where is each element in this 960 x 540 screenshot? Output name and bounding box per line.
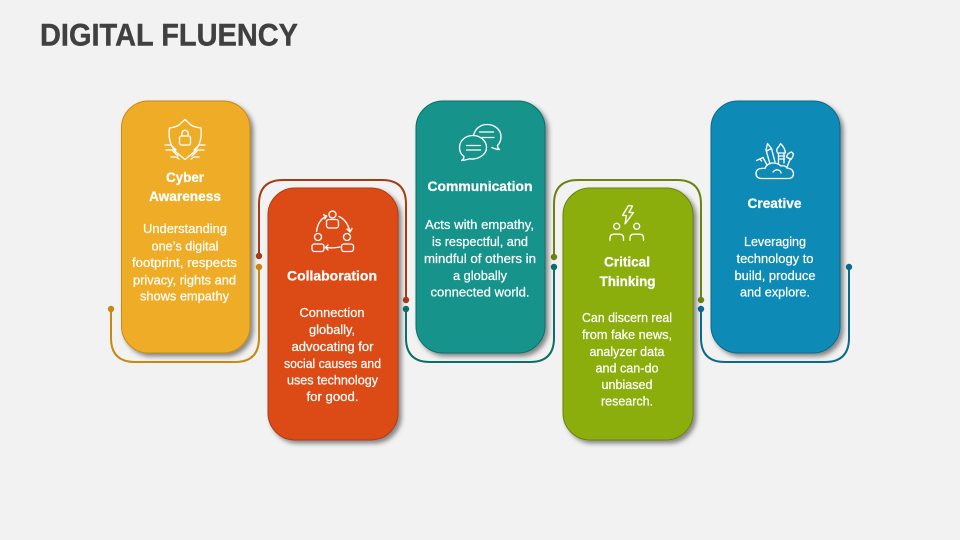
text: communication: is respectful, and: [432, 235, 528, 249]
connector: blue: [698, 264, 852, 362]
text: collaboration: [284, 306, 381, 404]
text: collaboration: for good.: [306, 390, 358, 404]
text: cyber awareness: [132, 222, 237, 304]
text: critical thinking: [582, 311, 672, 408]
heading: critical thinking: Critical: [604, 254, 650, 270]
card background: critical thinking: [563, 188, 693, 440]
text: collaboration: social causes and: [284, 357, 381, 371]
title: DIGITAL FLUENCY: [40, 16, 298, 52]
text: communication: [424, 218, 536, 300]
text: collaboration: uses technology: [287, 374, 379, 388]
text: creative: build, produce: [734, 269, 816, 283]
card background: cyber awareness: [122, 101, 250, 353]
connector: red: [256, 180, 409, 303]
text: critical thinking: unbiased: [602, 378, 653, 392]
text: collaboration: globally,: [309, 323, 355, 337]
heading: cyber awareness: Awareness: [149, 188, 221, 204]
heading: critical thinking: Thinking: [600, 273, 656, 289]
text: communication: connected world.: [430, 286, 530, 300]
text: creative: [734, 235, 816, 300]
panel: creative: [711, 101, 840, 353]
panel: cyber awareness: [122, 101, 250, 353]
text: critical thinking: analyzer data: [590, 345, 665, 359]
connector: gold: [108, 264, 262, 362]
panel: communication: [416, 101, 545, 353]
icon: art tools on a cloud: [756, 144, 794, 178]
text: creative: technology to: [736, 252, 814, 266]
connector: teal: [403, 264, 557, 362]
text: collaboration: Connection: [300, 306, 365, 320]
heading: creative: Creative: [748, 195, 802, 211]
text: cyber awareness: privacy, rights and: [133, 274, 236, 288]
text: cyber awareness: shows empathy: [140, 290, 230, 304]
icon: two people with lightning: [610, 206, 644, 240]
panel: critical thinking: [563, 188, 693, 440]
text: critical thinking: research.: [601, 394, 653, 408]
card background: creative: [711, 101, 840, 353]
icon: shield with lock: [165, 120, 205, 160]
text: cyber awareness: footprint, respects: [132, 256, 237, 270]
heading: cyber awareness: Cyber: [166, 169, 205, 185]
icon: speech bubbles: [460, 124, 501, 160]
text: cyber awareness: one’s digital: [152, 240, 218, 254]
heading: cyber awareness: [149, 169, 221, 204]
text: communication: mindful of others in: [424, 252, 536, 266]
connector: olive: [551, 180, 704, 303]
heading: communication: Communication: [428, 178, 532, 194]
heading: critical thinking: [600, 254, 656, 289]
text: creative: Leveraging: [744, 235, 806, 249]
text: communication: Acts with empathy,: [425, 218, 534, 232]
text: collaboration: advocating for: [292, 340, 374, 354]
text: critical thinking: from fake news,: [582, 328, 672, 342]
card background: collaboration: [268, 188, 398, 440]
text: critical thinking: and can-do: [596, 362, 659, 376]
icon: collaboration cycle: [312, 211, 354, 252]
heading: collaboration: Collaboration: [287, 268, 377, 284]
card background: communication: [416, 101, 545, 353]
text: creative: and explore.: [740, 286, 810, 300]
text: critical thinking: Can discern real: [582, 311, 672, 325]
text: communication: a globally: [453, 269, 508, 283]
panel: collaboration: [268, 188, 398, 440]
text: cyber awareness: Understanding: [143, 222, 227, 236]
